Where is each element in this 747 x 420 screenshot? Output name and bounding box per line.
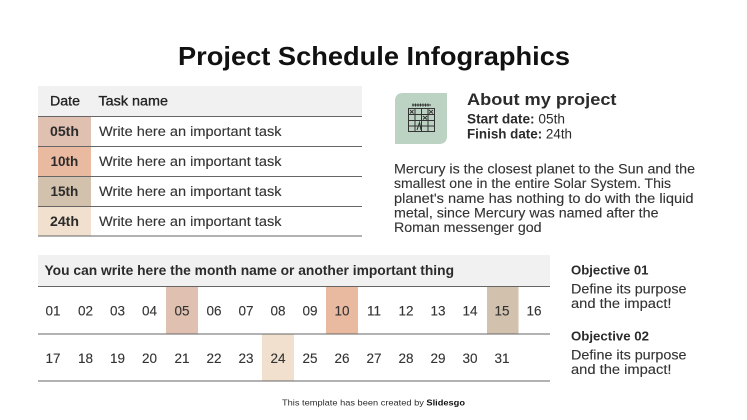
- row: 24th: 24th: [50, 214, 79, 229]
- row: 10th: [38, 146, 282, 176]
- month header: You can write here the month name or another important thing: [44, 263, 454, 278]
- objective 01: and the impact!: [571, 296, 672, 311]
- table header: [38, 86, 362, 116]
- days row 1: 14: [462, 304, 478, 318]
- panel: month calendar: [38, 255, 550, 381]
- days row 2: 29: [430, 351, 446, 366]
- objective 01: [571, 262, 686, 311]
- days row 2: 28: [398, 351, 414, 366]
- objective 02: [571, 328, 686, 377]
- days row 1: 16: [526, 304, 542, 318]
- project description: Roman messenger god: [394, 220, 542, 235]
- days row 1: 04: [142, 304, 157, 318]
- days row 1: 09: [302, 304, 318, 318]
- days row 2: 18: [78, 351, 93, 366]
- project description: metal, since Mercury was named after the: [394, 206, 658, 220]
- days row 2: 21: [174, 351, 190, 366]
- days row 1: 02: [78, 304, 93, 318]
- row: 05th: 05th: [50, 124, 79, 139]
- highlight: day 10: [326, 287, 358, 334]
- month header: [38, 255, 550, 286]
- objective 02: Define its purpose: [571, 348, 686, 362]
- start date: Start date: 05th: [467, 112, 565, 126]
- days row 2: 22: [206, 351, 222, 366]
- objective 02: and the impact!: [571, 362, 672, 377]
- highlight: day 05: [166, 287, 198, 334]
- table header: Date: [50, 94, 80, 108]
- objective 02: Objective 02: [571, 328, 649, 344]
- days row 1: 07: [238, 304, 254, 318]
- project description: Mercury is the closest planet to the Sun and the: [394, 162, 695, 176]
- days row 1: 10: [334, 304, 350, 318]
- days row 2: 27: [366, 351, 382, 366]
- table header: Task name: [98, 94, 168, 108]
- row: 15th: 15th: [50, 184, 78, 199]
- days row 1: 15: [494, 304, 510, 318]
- days row 1: 11: [367, 304, 381, 318]
- row: 10th: 10th: [50, 154, 78, 169]
- finish date: Finish date: 24th: [467, 126, 572, 142]
- highlight: day 15: [487, 287, 518, 334]
- heading: about my project: About my project: [467, 90, 617, 109]
- days row 1: 05: [174, 304, 190, 318]
- days row 1: 12: [398, 304, 414, 318]
- days row 2: 19: [110, 351, 125, 366]
- title: Project Schedule Infographics: [178, 41, 570, 71]
- days row 2: 25: [302, 351, 318, 366]
- days row 1: 03: [110, 304, 125, 318]
- project description: [394, 162, 695, 235]
- days row 2: 26: [334, 351, 350, 366]
- days row 1: 13: [430, 304, 446, 318]
- days row 2: 17: [45, 351, 61, 366]
- row: 05th: Write here an important task: [99, 124, 282, 139]
- days row 2: [45, 351, 510, 366]
- days row 2: 24: [270, 351, 286, 366]
- footer credit: This template has been created by Slidesgo: [282, 398, 465, 408]
- days row 2: 23: [238, 351, 254, 366]
- row: 15th: Write here an important task: [99, 184, 282, 199]
- days row 1: 06: [206, 304, 222, 318]
- icon: calendar: [395, 93, 447, 144]
- days row 1: 08: [270, 304, 286, 318]
- objective 01: Objective 01: [571, 262, 648, 278]
- row: 15th: [38, 176, 282, 206]
- highlight: day 24: [262, 334, 294, 381]
- days row 2: 31: [494, 351, 510, 366]
- row: 24th: [38, 206, 282, 236]
- row: 05th: [38, 116, 282, 146]
- days row 2: 20: [142, 351, 157, 366]
- days row 1: 01: [45, 304, 61, 318]
- project description: planet's name has nothing to do with the liquid: [394, 191, 694, 206]
- row: 24th: Write here an important task: [99, 214, 282, 229]
- panel: task table: [38, 86, 362, 236]
- objective 01: Define its purpose: [571, 282, 686, 296]
- project description: smallest one in the entire Solar System. This: [394, 176, 671, 191]
- days row 1: [45, 304, 542, 318]
- row: 10th: Write here an important task: [99, 154, 282, 169]
- days row 2: 30: [462, 351, 478, 366]
